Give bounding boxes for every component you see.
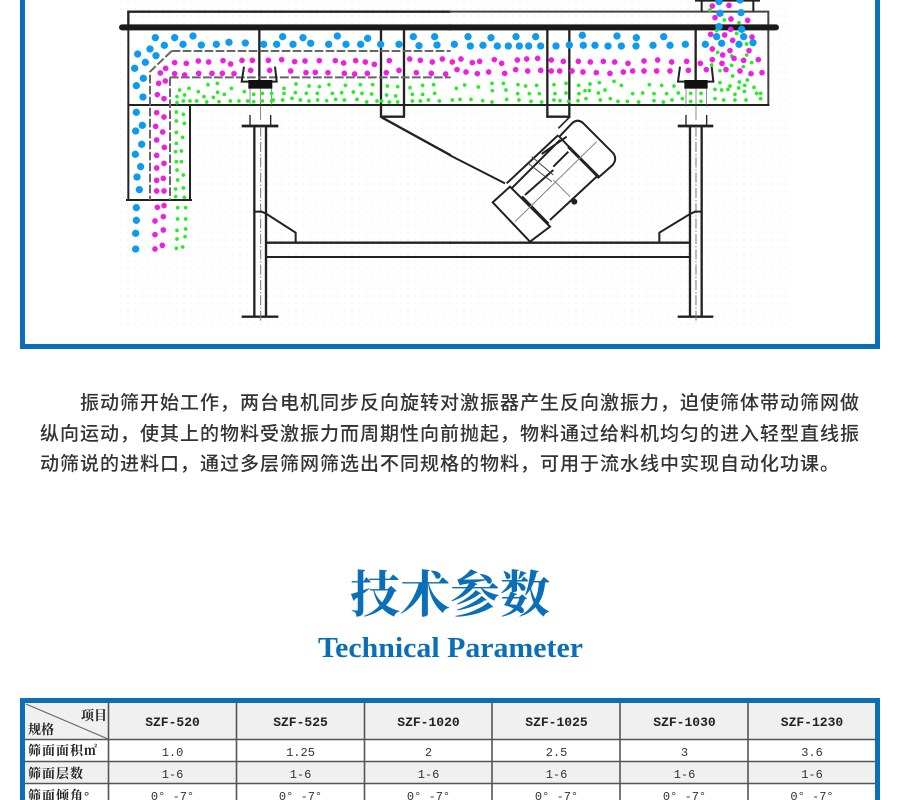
drawing: left half of the machine xyxy=(122,12,451,322)
text block: working principle: 纵向运动，使其上的物料受激振力而周期性向前抛起，物料通过给料机均匀的进入轻型直线振 xyxy=(40,424,860,444)
text block: working principle: 振动筛开始工作，两台电机同步反向旋转对激振器产生反向激振力，迫使筛体带动筛网做 xyxy=(80,393,860,414)
row values: 2.5 xyxy=(546,746,567,760)
row values xyxy=(151,746,834,800)
table header cell: 规格 xyxy=(28,722,54,737)
row labels: 筛面面积㎡ xyxy=(28,743,98,759)
table header models: SZF-1025 xyxy=(525,715,588,730)
row values: 1-6 xyxy=(162,768,183,782)
table header cell xyxy=(28,708,107,737)
row values: 1.0 xyxy=(162,746,183,760)
table header cell: 项目 xyxy=(81,708,107,723)
row values: 1-6 xyxy=(290,768,311,782)
material particles: right half xyxy=(452,0,762,102)
text block: working principle: 动筛说的进料口，通过多层筛网筛选出不同规格的物料，可用于流水线中实现自动化功课。 xyxy=(40,454,840,475)
row values: 1.25 xyxy=(286,746,315,760)
table header models xyxy=(145,715,843,730)
row values: 2 xyxy=(425,746,432,760)
table header models: SZF-1020 xyxy=(397,715,460,730)
panel: technical parameter table xyxy=(22,700,878,800)
row values: 3.6 xyxy=(801,746,823,760)
table header models: SZF-1230 xyxy=(781,715,843,730)
row labels xyxy=(28,743,98,800)
icon: motor xyxy=(493,117,615,242)
material particles: left half xyxy=(135,36,446,249)
panel: vibrating screen diagram xyxy=(22,0,878,346)
row values: 1-6 xyxy=(801,768,823,782)
title: 技术参数: 技术参数 xyxy=(350,567,550,623)
row labels: 筛面层数 xyxy=(28,766,84,781)
table row backgrounds xyxy=(25,703,875,783)
row values: 1-6 xyxy=(418,768,439,782)
row values: 1-6 xyxy=(674,768,695,782)
table header models: SZF-520 xyxy=(145,715,200,730)
table header models: SZF-525 xyxy=(273,715,328,730)
row values: 1-6 xyxy=(546,768,567,782)
subtitle: Technical Parameter: Technical Parameter xyxy=(318,633,583,664)
table header models: SZF-1030 xyxy=(653,715,716,730)
row values: 3 xyxy=(681,746,688,760)
drawing: right half and motor xyxy=(449,0,776,322)
text block: working principle xyxy=(40,392,860,475)
